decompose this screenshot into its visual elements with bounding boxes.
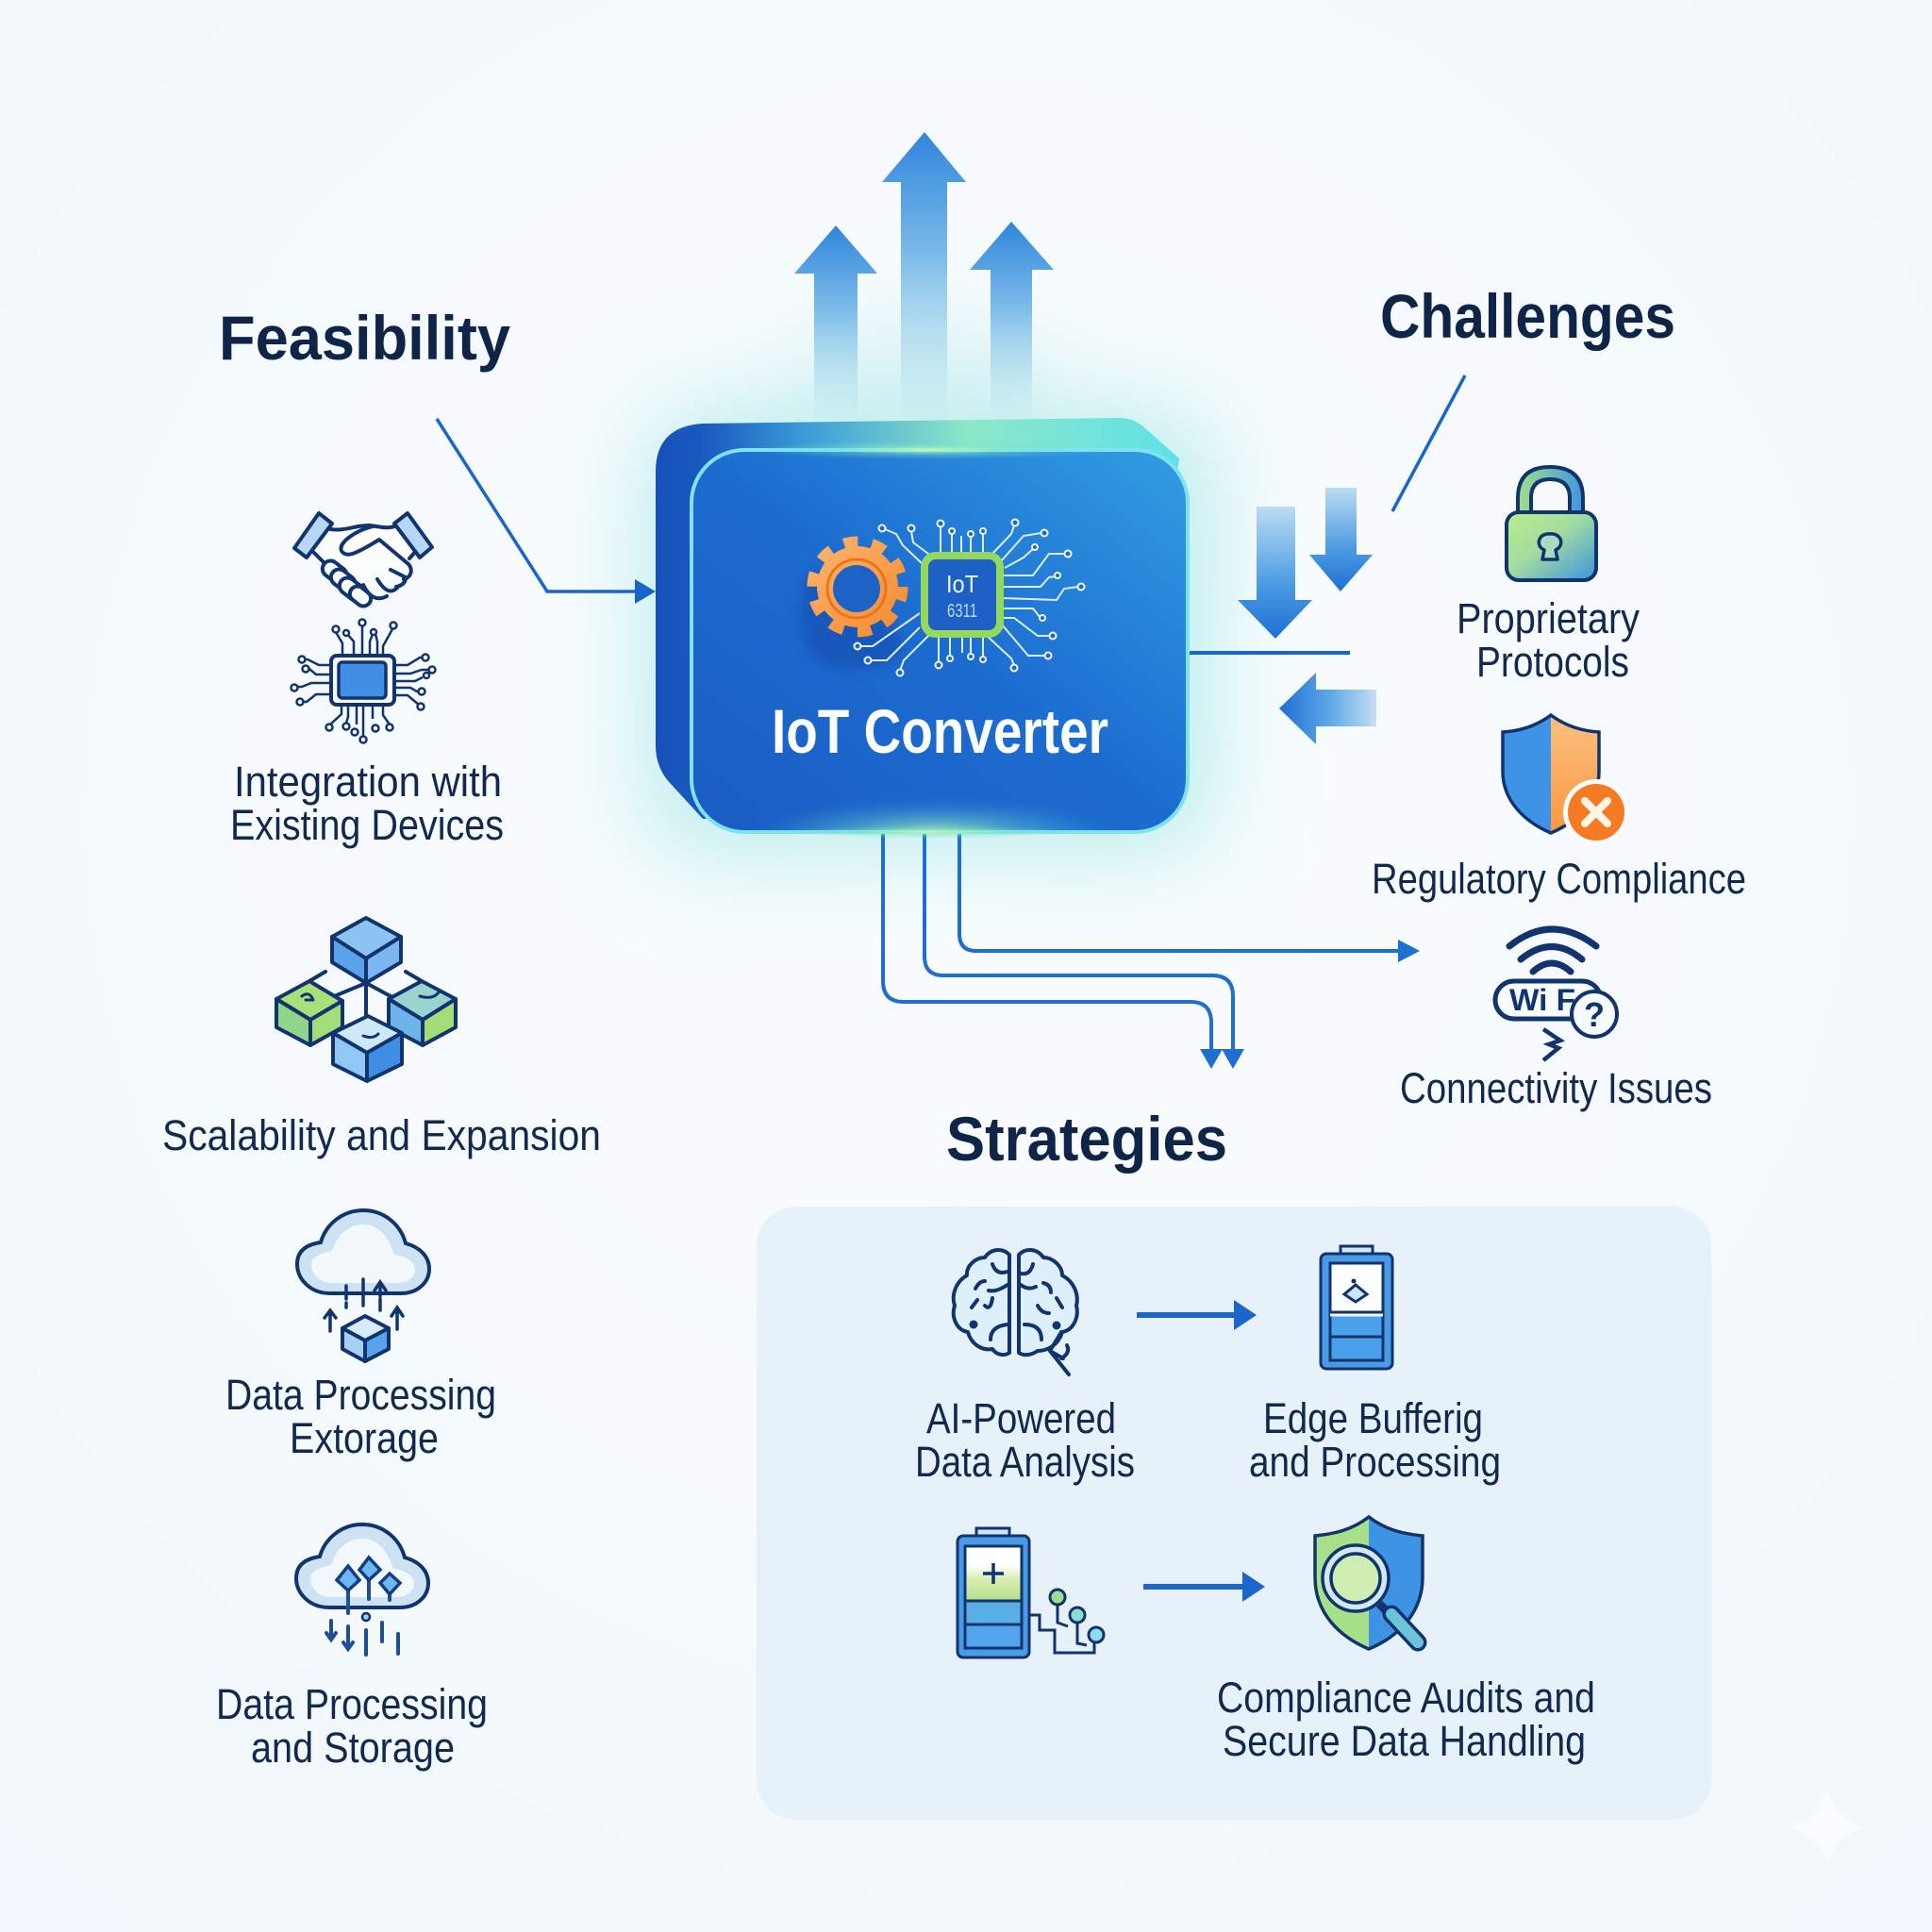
label: Scalability and Expansion (162, 1111, 601, 1159)
arrow: AI analysis to edge buffering (1137, 1300, 1257, 1330)
feasibility item: data processing extorage (225, 1210, 496, 1462)
label: Data Analysis (915, 1438, 1135, 1486)
label: Regulatory Compliance (1372, 855, 1746, 903)
label: Extorage (290, 1414, 439, 1462)
icon: gear and IoT chip (802, 519, 1085, 675)
challenge: connectivity issues (1400, 929, 1712, 1112)
feasibility item: integration with existing devices (230, 513, 504, 849)
heading: Feasibility: Feasibility (219, 303, 510, 373)
device title: IoT Converter (772, 696, 1108, 766)
icon: cloud with data cube (297, 1210, 429, 1361)
label: Compliance Audits and (1217, 1674, 1595, 1722)
feasibility item: scalability and expansion (162, 918, 601, 1159)
icon: connected cubes (276, 918, 456, 1081)
challenge: proprietary protocols (1457, 467, 1640, 686)
challenge: regulatory compliance (1372, 715, 1746, 903)
label: Proprietary (1457, 594, 1640, 642)
heading: Challenges: Challenges (1380, 281, 1675, 351)
device front face (691, 450, 1188, 832)
icon: battery with circuit (958, 1528, 1104, 1657)
glow around converter (641, 330, 1217, 858)
label: Secure Data Handling (1223, 1717, 1586, 1765)
connectors: converter to strategies and connectivity (883, 830, 1420, 1069)
icon: AI brain (954, 1250, 1077, 1374)
watermark sparkle (1790, 1790, 1865, 1865)
IoT Converter device (656, 418, 1188, 870)
label: and Storage (251, 1724, 455, 1772)
panel: strategies (757, 1207, 1711, 1820)
arrow: feasibility to converter (437, 419, 656, 604)
icon: shield with warning badge (1503, 715, 1629, 845)
label: Existing Devices (230, 801, 504, 849)
icon: wifi with question mark: Wi F (1509, 983, 1575, 1017)
icon: circuit chip (291, 619, 436, 743)
arrows: challenges entering converter (1189, 488, 1376, 744)
feasibility item: data processing and storage (216, 1524, 488, 1772)
label: Data Processing (225, 1371, 496, 1419)
icon: cloud with data arrows (296, 1524, 428, 1655)
arrows pointing up (794, 132, 1054, 419)
label: and Processing (1249, 1438, 1501, 1486)
icon: handshake (294, 513, 432, 609)
icon: shield with magnifier (1315, 1517, 1423, 1649)
label: Protocols (1476, 638, 1629, 686)
label: Data Processing (216, 1680, 488, 1728)
infographic canvas (164, 132, 1745, 1820)
arrow: battery to compliance shield (1143, 1572, 1265, 1602)
icon: wifi with question mark (1495, 929, 1617, 1060)
label: Edge Bufferig (1263, 1394, 1483, 1442)
icon: wifi with question mark: ? (1584, 995, 1605, 1034)
device back face (656, 418, 1179, 819)
icon: gear and IoT chip: 6311 (947, 601, 977, 622)
line: challenges leader (1392, 375, 1465, 511)
icon: battery buffer (1321, 1246, 1392, 1369)
icon: gear and IoT chip: IoT (946, 570, 978, 598)
label: Connectivity Issues (1400, 1064, 1712, 1112)
heading: Strategies: Strategies (946, 1104, 1227, 1174)
label: AI-Powered (926, 1394, 1116, 1442)
icon: padlock (1507, 467, 1596, 580)
label: Integration with (234, 758, 502, 806)
